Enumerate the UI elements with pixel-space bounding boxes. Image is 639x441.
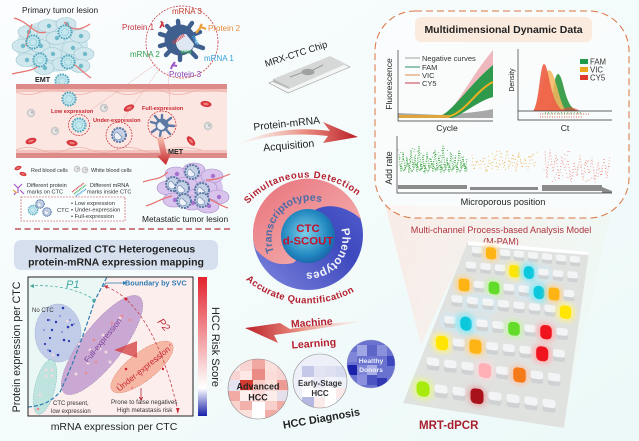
label: risk notes: Prone to false negatives (111, 399, 177, 406)
group: low expression (51, 109, 94, 136)
legend: CTC expression box: • Full-expression (71, 214, 114, 220)
cell: released CTC (55, 74, 69, 88)
chart: scatter map (28, 277, 193, 417)
chart: fluorescence curves: FAM (422, 63, 437, 72)
group: full expression: Full-expression (142, 106, 184, 112)
dashed outline (375, 11, 629, 218)
chart: density: Ct (561, 123, 570, 133)
ring label: Transcriptotypes: Transcriptotypes (265, 195, 322, 254)
chart: fluorescence curves: VIC (422, 71, 435, 80)
group: under expression (93, 118, 141, 148)
label: MRT-dPCR: MRT-dPCR (419, 420, 479, 432)
color bar (198, 277, 207, 416)
label: Protein 3: Protein 3 (169, 70, 202, 79)
red ring (253, 179, 361, 264)
chart: fluorescence curves: Cycle (436, 123, 458, 133)
group: low expression: Low expression (51, 109, 94, 115)
label: mRNA 3: mRNA 3 (172, 7, 202, 16)
legend: CTC expression box (21, 197, 125, 221)
core label: d-SCOUT (283, 236, 333, 248)
label: Full-expression: Full-expression (82, 317, 124, 364)
plate edge (468, 241, 589, 255)
label: EMT: EMT (35, 75, 51, 84)
chart: fluorescence curves: Negative curves (422, 54, 476, 63)
label: HCC Diagnosis: HCC Diagnosis (282, 406, 361, 432)
label: Protein 1: Protein 1 (122, 23, 155, 32)
label: Machine: Machine (291, 317, 333, 330)
heading: Simultaneous Detection: Simultaneous Detection (244, 171, 360, 203)
label: Under-expression: Under-expression (114, 344, 172, 393)
label: Learning: Learning (291, 336, 337, 352)
legend: CTC expression box: CTC (57, 208, 69, 214)
label: Protein-mRNA: Protein-mRNA (253, 116, 321, 133)
heading: primary tumor lesion: Primary tumor lesion (22, 5, 98, 15)
cell: CTC in vessel (62, 92, 76, 106)
label: Acquisition: Acquisition (263, 138, 315, 154)
callout: CTC molecular detail (146, 6, 218, 78)
legend: protein marks (13, 183, 67, 196)
chart: density: VIC (590, 66, 603, 74)
legend: protein marks: marks on CTC (27, 190, 63, 196)
ring label: Phenotypes: Phenotypes (306, 228, 351, 279)
heading: M-PAM model: (M-PAM) (483, 236, 519, 246)
group: full expression (142, 106, 184, 139)
heading pill: protein-mRNA expression mapping (28, 256, 204, 268)
arrow: MET (157, 136, 171, 165)
zoom-in connector lines (88, 64, 170, 118)
label: CTC present, low expression: low expression (51, 409, 91, 415)
label: mRNA 2: mRNA 2 (130, 50, 160, 59)
callout: Boundary by SVC: Boundary by SVC (125, 278, 187, 288)
core circle (281, 209, 335, 263)
panel: CTC biology (12, 5, 241, 224)
label: Protein 2: Protein 2 (208, 24, 241, 33)
heading pill (14, 240, 218, 270)
heading: M-PAM model: Multi-channel Process-based Analysis Model (411, 225, 591, 235)
panel: multidimensional dynamic data (375, 11, 629, 218)
legend: blood cells: White blood cells (91, 168, 132, 174)
heatmap: Healthy Donors (347, 340, 395, 388)
legend: protein marks: Different protein (27, 183, 67, 189)
heatmap: Advanced HCC (228, 359, 288, 419)
chart: add rate scatter (384, 136, 612, 207)
heading pill: Multidimensional Dynamic Data (424, 24, 583, 36)
legend: mRNA marks: Different mRNA (90, 183, 129, 189)
chart: density: FAM (590, 58, 606, 66)
label: risk notes: High metastasis risk (117, 407, 173, 414)
heading: Accurate Quantification: Accurate Quantification (246, 276, 354, 304)
light beam from chip to data panel (385, 205, 612, 428)
arrow: protein-mRNA acquisition (237, 122, 358, 145)
legend: CTC expression box: • Under-expression (71, 208, 120, 214)
heatmap: Healthy Donors: Donors (359, 367, 383, 374)
heatmap: Early-Stage HCC: HCC (311, 389, 329, 398)
legend: CTC expression box: • Low expression (71, 201, 115, 207)
heatmap: Advanced HCC: Advanced (236, 382, 280, 392)
array plate (403, 241, 589, 428)
panel: expression mapping (11, 240, 221, 433)
region label: P2: P2 (155, 316, 172, 334)
color bar label: HCC Risk Score (209, 307, 221, 387)
chart: density: CY5 (590, 74, 606, 82)
chart: add rate scatter: Add rate (384, 151, 394, 185)
chart: fluorescence curves (384, 50, 493, 133)
chart: density: Density (509, 68, 516, 92)
red dashed divider (15, 228, 233, 230)
x-axis label: mRNA expression per CTC (51, 421, 178, 433)
chip body (269, 56, 350, 93)
panel: MRT-dPCR array (403, 241, 589, 432)
reaction wells (413, 244, 580, 417)
heatmap: Early-Stage HCC: Early-Stage (298, 379, 342, 388)
heading pill: Normalized CTC Heterogeneous (35, 244, 195, 256)
blue ring (253, 180, 363, 290)
heatmap: Advanced HCC: HCC (248, 392, 268, 402)
label: No CTC: No CTC (32, 308, 54, 314)
heading pill (415, 17, 592, 42)
label: mRNA 1: mRNA 1 (204, 54, 234, 63)
label: MRX-CTC Chip: MRX-CTC Chip (263, 38, 329, 69)
group: under expression: Under-expression (93, 118, 141, 124)
label: MET: MET (168, 147, 184, 156)
arrow: EMT (31, 85, 51, 101)
legend: mRNA marks: marks inside CTC (87, 190, 131, 196)
blood vessel (16, 84, 227, 158)
region label: P1: P1 (66, 279, 79, 291)
heading: metastatic tumor lesion: Metastatic tumor lesion (142, 214, 228, 224)
heatmap: Healthy Donors: Healthy (359, 358, 383, 365)
legend: mRNA marks (72, 183, 131, 196)
heatmap: Early-Stage HCC (293, 354, 347, 408)
illustration: primary tumor (12, 18, 94, 78)
chart: density (509, 49, 612, 133)
chip: MRX-CTC (263, 38, 350, 93)
chart: add rate scatter: Microporous position (461, 197, 545, 207)
legend: blood cells (14, 165, 132, 177)
arrow: machine learning (245, 321, 366, 343)
y-axis label: Protein expression per CTC (11, 281, 23, 412)
chart: fluorescence curves: CY5 (422, 79, 437, 88)
legend: blood cells: Red blood cells (31, 168, 68, 174)
illustration: metastatic tumor (143, 163, 230, 213)
label: CTC present, low expression: CTC present, (53, 401, 89, 407)
core label: CTC (296, 223, 320, 235)
chart: fluorescence curves: Fluorescence (384, 58, 394, 110)
panel: HCC diagnosis (228, 340, 395, 432)
hub: CTC d-SCOUT (244, 171, 363, 304)
